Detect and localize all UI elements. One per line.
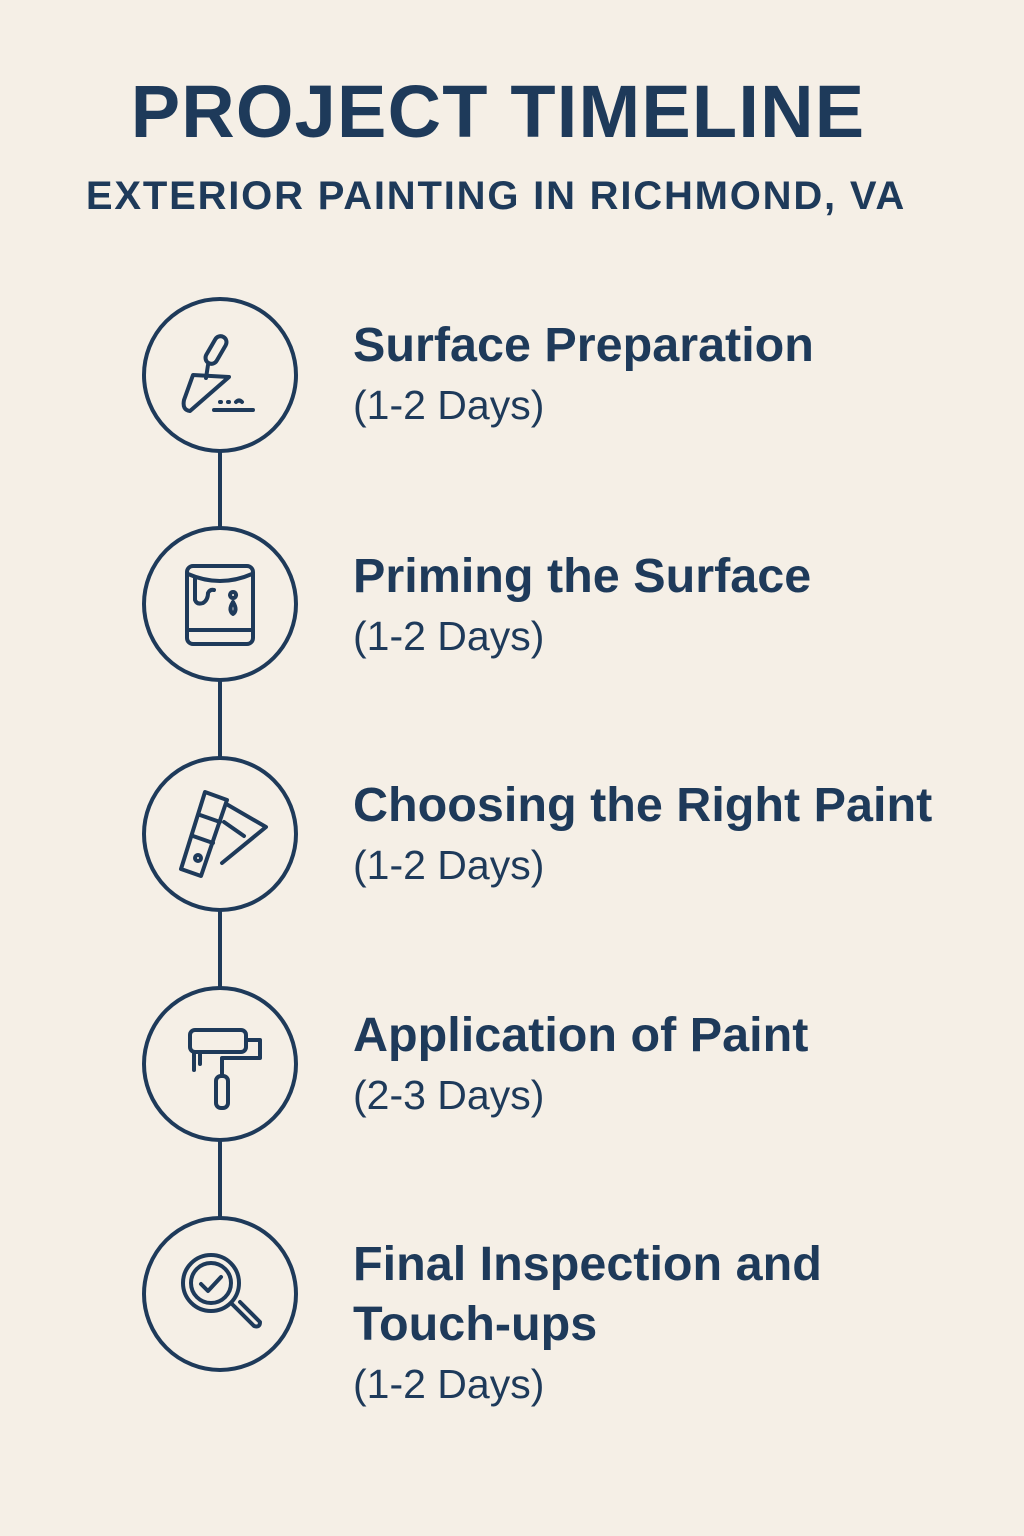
icon: paint roller bbox=[144, 988, 296, 1140]
step 4 bbox=[353, 1008, 808, 1118]
subtitle: EXTERIOR PAINTING IN RICHMOND, VA bbox=[86, 174, 906, 218]
step 4: Application of Paint bbox=[353, 1008, 808, 1062]
step 3: (1-2 Days) bbox=[353, 842, 544, 888]
step 5: (1-2 Days) bbox=[353, 1361, 544, 1407]
step 2: Priming the Surface bbox=[353, 549, 811, 603]
icon: trowel bbox=[144, 299, 296, 451]
step 5 bbox=[353, 1237, 822, 1407]
connector line bbox=[218, 451, 222, 1218]
step 2 bbox=[353, 549, 811, 659]
icon: magnifier check bbox=[144, 1218, 296, 1370]
title: PROJECT TIMELINE bbox=[131, 70, 865, 153]
icon: swatches bbox=[144, 758, 296, 910]
step 1: Surface Preparation bbox=[353, 318, 814, 372]
step 2: (1-2 Days) bbox=[353, 613, 544, 659]
step 1 bbox=[353, 318, 814, 428]
step 3 bbox=[353, 778, 932, 888]
step 5: Touch-ups bbox=[353, 1297, 597, 1351]
step 4: (2-3 Days) bbox=[353, 1072, 544, 1118]
step 5: Final Inspection and bbox=[353, 1237, 822, 1291]
icon: paint can bbox=[144, 528, 296, 680]
timeline icons bbox=[142, 297, 298, 1372]
step 1: (1-2 Days) bbox=[353, 382, 544, 428]
step 3: Choosing the Right Paint bbox=[353, 778, 932, 832]
